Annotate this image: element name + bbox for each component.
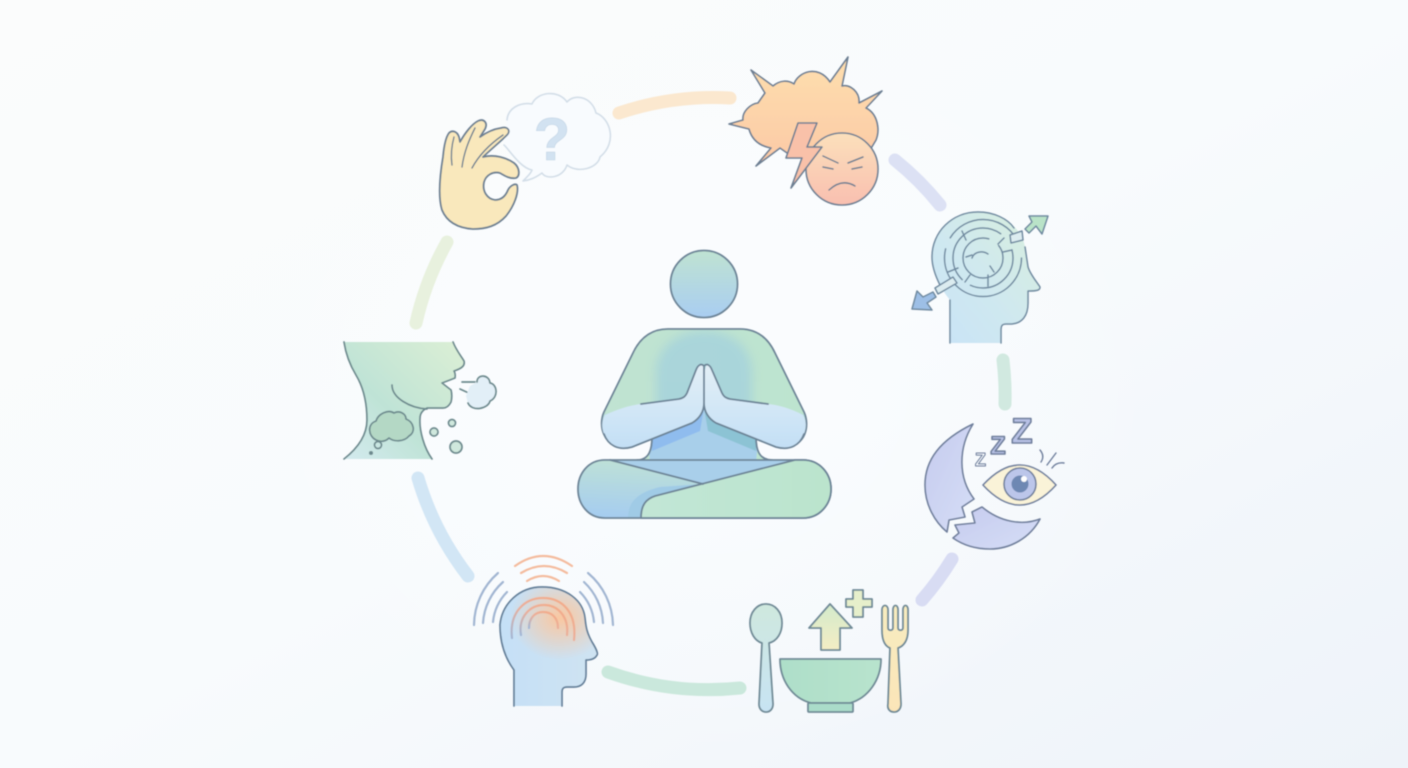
icon: hand with OK pinch and question cloud — [440, 94, 610, 229]
head silhouette — [932, 212, 1040, 343]
small throat bubbles — [374, 442, 382, 448]
side waves — [474, 573, 613, 625]
arc: blue lower left — [418, 478, 468, 576]
figure head — [670, 250, 738, 318]
congestion cloud — [370, 412, 413, 441]
up right green arrow — [1025, 216, 1048, 234]
down left blue arrow — [912, 291, 936, 310]
iris — [1004, 468, 1036, 500]
arc: lavender upper right — [895, 160, 940, 205]
head silhouette — [500, 587, 597, 706]
icon: spoon, bowl, fork and nutrition arrow — [750, 590, 908, 712]
spoon — [750, 604, 782, 712]
spiky cloud — [729, 57, 882, 166]
jaw line — [392, 385, 427, 409]
thought cloud — [504, 94, 610, 181]
arc: pale green upper left — [416, 242, 447, 323]
moon upper piece — [925, 424, 974, 532]
moon lower piece — [953, 507, 1040, 549]
central meditating figure — [578, 250, 831, 518]
sleep letters — [975, 412, 1033, 470]
warm glow — [515, 588, 592, 656]
icon: head with vibration waves — [474, 556, 613, 706]
air bubbles — [430, 420, 462, 453]
eye — [983, 465, 1056, 505]
top waves — [515, 556, 572, 581]
neck fill — [344, 342, 464, 459]
up arrow — [809, 604, 852, 650]
icon: cracked moon with sleepless eye — [925, 412, 1064, 549]
figure torso — [602, 329, 807, 462]
eye strain lines — [1040, 450, 1064, 468]
icon: head with maze and arrows — [912, 212, 1048, 343]
bowl — [780, 659, 881, 703]
large Z: Z — [1011, 412, 1033, 451]
question mark: ? — [534, 106, 570, 173]
figure arm outlines — [604, 365, 804, 448]
breath puff — [466, 376, 496, 409]
connector bars — [935, 231, 1023, 294]
angry face — [806, 133, 878, 205]
arc: green right — [1003, 360, 1005, 404]
maze rings — [944, 220, 1022, 296]
plus sign — [846, 590, 872, 617]
icon: angry thundercloud — [729, 57, 882, 205]
hand — [440, 120, 519, 229]
pupil — [1012, 476, 1028, 492]
inner waves — [512, 598, 574, 640]
figure left arm and hand — [602, 365, 704, 448]
face features — [823, 156, 863, 190]
arc: orange top — [619, 98, 730, 113]
arc: green bottom — [608, 672, 740, 690]
ring of connecting arc segments — [416, 98, 1005, 690]
throat outline — [344, 342, 464, 459]
fork — [882, 606, 908, 712]
finger lines — [451, 128, 503, 168]
small z: Z — [975, 450, 986, 470]
figure crossed legs — [578, 460, 831, 518]
figure right arm and hand — [704, 365, 806, 448]
lightning bolt — [786, 123, 822, 188]
medium Z: Z — [990, 432, 1006, 460]
breath lines — [460, 382, 475, 395]
bowl base — [808, 703, 853, 712]
eye highlight — [1021, 476, 1027, 482]
arc: lavender lower right — [922, 559, 952, 600]
icon: throat and breath — [344, 342, 496, 459]
